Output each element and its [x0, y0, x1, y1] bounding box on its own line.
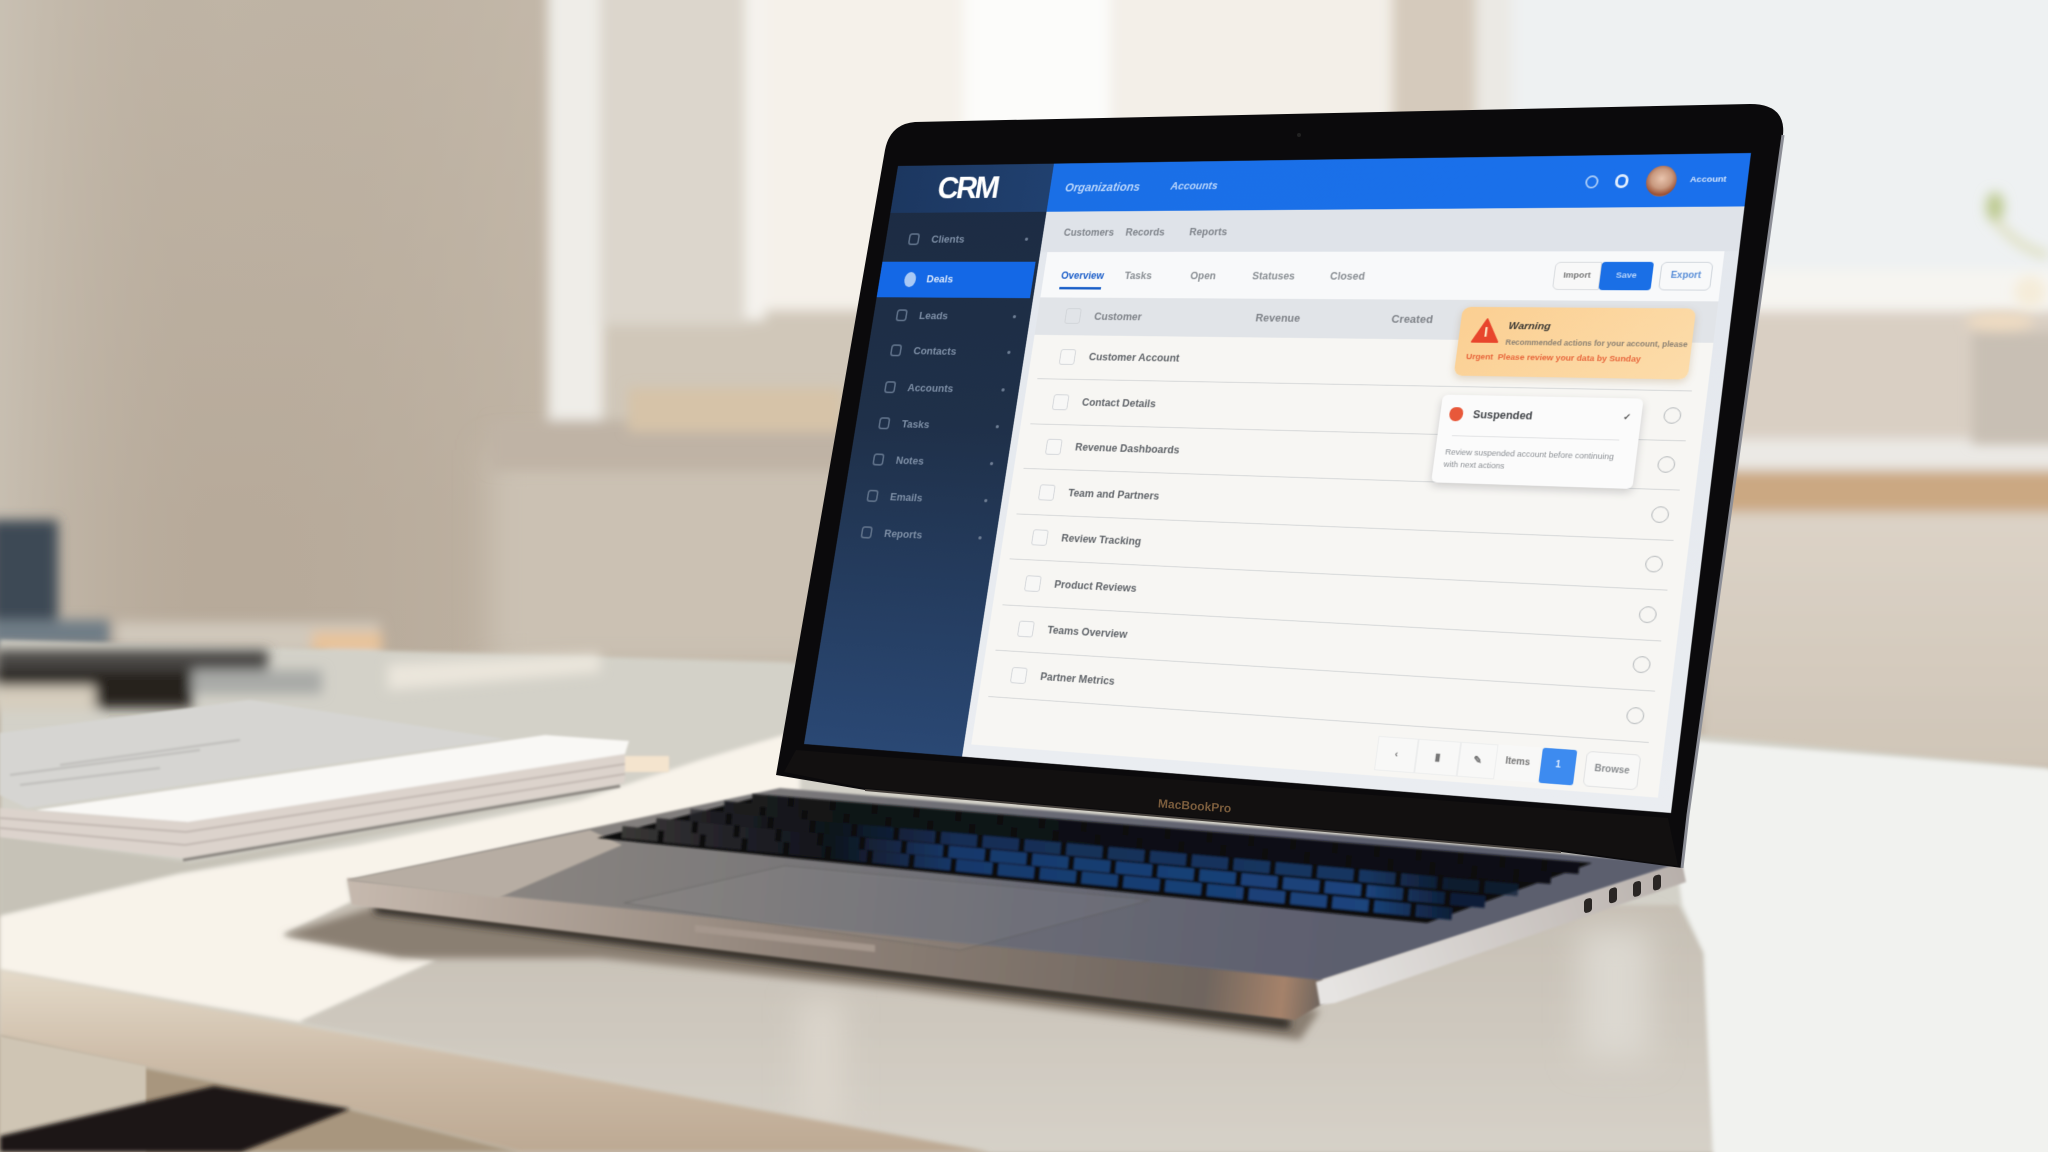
planter and plant: [1966, 192, 2048, 444]
icon: warning triangle: [1470, 318, 1498, 344]
menu item: Tasks: [901, 418, 930, 431]
laptop shadow on desk: [283, 905, 1320, 1040]
active tab: Overview: [1060, 270, 1105, 281]
table row 6: [1002, 575, 1662, 642]
column heading: Created: [1391, 313, 1434, 326]
table row 4: Team and Partners: [1067, 487, 1160, 502]
table row 3: Revenue Dashboards: [1074, 441, 1180, 456]
popover message: Review suspended account before continuing: [1445, 447, 1615, 461]
table row 5: [1010, 529, 1668, 591]
alert title: Warning: [1508, 321, 1551, 332]
under-desk pale panel: [0, 1036, 146, 1152]
pagination icon: [1457, 742, 1499, 779]
toolbar button: [1552, 262, 1602, 290]
desk front face: [0, 970, 990, 1152]
pagination icon: ▮: [1434, 752, 1441, 763]
menu item: [884, 381, 1005, 395]
menu item: [872, 453, 994, 467]
column heading: Customer: [1093, 311, 1143, 323]
far desk stack of books: [0, 650, 322, 710]
pencil tip: [625, 756, 669, 772]
bright desk at right: [1660, 738, 2048, 1152]
tab: Open: [1190, 270, 1217, 282]
table row 7: Teams Overview: [1047, 624, 1128, 641]
pagination active page: [1538, 748, 1577, 785]
sunlit desk patch: [0, 730, 800, 1022]
menu item: Notes: [895, 454, 925, 467]
window frames and panes: [490, 0, 2048, 772]
popover divider: [1452, 435, 1619, 440]
tabs: [1040, 251, 1725, 301]
active menu item: Deals: [926, 273, 954, 285]
webcam: [1297, 133, 1301, 137]
sun streak on far desk: [388, 654, 600, 690]
table row 7: [996, 620, 1656, 692]
table row 8: [988, 667, 1649, 743]
table header: [1035, 297, 1718, 343]
menu item: Emails: [889, 490, 923, 504]
header icon: [1585, 175, 1599, 188]
desk surface: [0, 640, 2048, 1152]
toolbar button: Import: [1563, 271, 1591, 280]
table row 1: [1037, 349, 1692, 392]
pagination previous: ‹: [1394, 749, 1399, 760]
popover message: with next actions: [1443, 460, 1505, 470]
menu item: [896, 309, 1016, 322]
base right side with ports: [1316, 862, 1686, 1005]
menu item: [878, 417, 1000, 431]
pagination active page: 1: [1555, 760, 1561, 770]
alert message: Recommended actions for your account, please: [1505, 338, 1688, 349]
chevron: ✓: [1622, 413, 1632, 423]
secondary button: [1658, 262, 1714, 291]
tab: Statuses: [1251, 270, 1296, 282]
table row 8: Partner Metrics: [1040, 670, 1116, 687]
header icon: [1614, 174, 1629, 188]
pagination next: [1583, 751, 1641, 790]
CRM logo band: CRM: [935, 172, 1000, 206]
secondary button: Export: [1670, 271, 1702, 281]
menu item: Leads: [918, 309, 949, 322]
sunlit part of palm rest: [347, 830, 622, 898]
notebook stack: [0, 700, 669, 860]
active menu item: [877, 262, 1036, 298]
popover title: Suspended: [1472, 408, 1533, 422]
table row 2: Contact Details: [1081, 396, 1157, 409]
pagination icon: ✎: [1473, 755, 1483, 766]
laptop brand text: MacBookPro: [1158, 796, 1232, 816]
sidebar: [804, 164, 1054, 757]
base top surface: [347, 788, 1682, 980]
window sill wood: [628, 388, 843, 432]
user avatar: [1644, 166, 1678, 197]
header title: Organizations: [1064, 180, 1141, 194]
menu item: Reports: [883, 527, 923, 541]
pagination text: [1494, 745, 1541, 783]
dark objects on the far desk: [0, 520, 382, 684]
table row 3: [1024, 438, 1680, 491]
wall below window sill: [490, 450, 890, 670]
table row 5: Review Tracking: [1061, 532, 1142, 548]
table row 4: [1016, 484, 1674, 541]
warning alert: [1454, 307, 1696, 380]
top header bar: [1047, 153, 1751, 212]
table row 2: [1030, 394, 1686, 442]
user name: Account: [1689, 175, 1727, 185]
keyboard: [597, 795, 1592, 923]
menu item: [890, 344, 1011, 357]
laptop screen: CRM application: [804, 153, 1751, 813]
CRM logo band: [890, 164, 1054, 213]
menu item: Accounts: [907, 381, 954, 395]
base front edge: [347, 878, 1329, 1020]
dim desk in front of notebook: [0, 790, 600, 916]
breadcrumb: Customers: [1063, 227, 1115, 238]
column heading: Revenue: [1255, 312, 1301, 324]
tab: Tasks: [1124, 270, 1153, 282]
table row 6: Product Reviews: [1054, 578, 1137, 594]
pagination text: Items: [1505, 756, 1531, 768]
header checkbox: [1064, 308, 1082, 324]
alert action: Urgent Please review your data by Sunday: [1466, 352, 1641, 363]
main bluish frame: [962, 206, 1745, 813]
laptop lid: [776, 104, 1783, 868]
pagination icon: [1414, 739, 1461, 777]
icon: shield: [1448, 407, 1464, 421]
menu item: [866, 490, 988, 504]
laptop reflection highlights: [800, 930, 1650, 1130]
breadcrumb: Reports: [1189, 226, 1228, 238]
dark object under desk: [0, 1086, 350, 1152]
contact shadow under front edge: [375, 908, 1290, 1024]
under-desk area: [0, 1036, 520, 1152]
pagination previous: [1374, 736, 1419, 773]
header subtitle: Accounts: [1170, 180, 1219, 192]
popover message: [1443, 447, 1615, 470]
breadcrumb nav: [1040, 206, 1745, 252]
details popover: [1431, 395, 1644, 489]
table row 1: Customer Account: [1088, 351, 1180, 364]
menu item: [908, 233, 1028, 246]
primary button: Save: [1615, 271, 1637, 280]
primary button: [1599, 262, 1654, 290]
tab: Closed: [1329, 270, 1366, 282]
desk near-side shaded area: [283, 903, 1713, 1152]
menu item: [860, 526, 982, 541]
trackpad: [624, 866, 1150, 950]
pagination next: Browse: [1594, 764, 1630, 776]
menu item: Clients: [931, 233, 966, 245]
white content panel: [971, 251, 1725, 798]
menu item: Contacts: [913, 345, 957, 357]
breadcrumb: Records: [1125, 226, 1166, 238]
